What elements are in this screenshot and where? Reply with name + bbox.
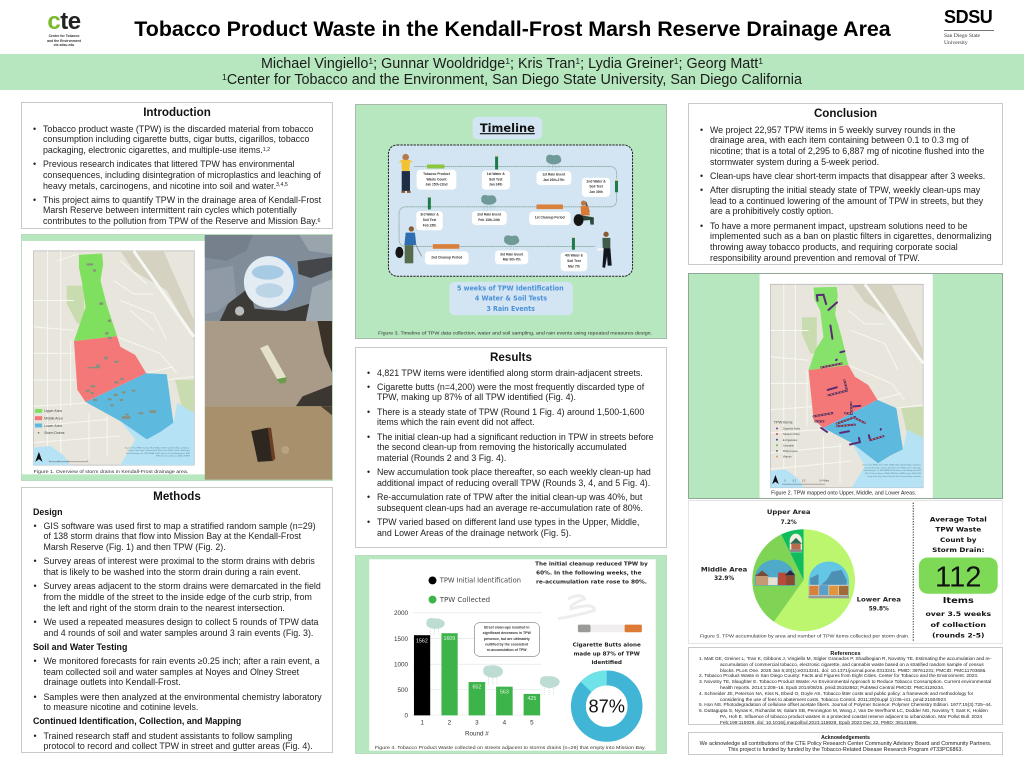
timeline labels: 3rd Rain Event — [500, 252, 524, 256]
summary: study counts: 5 weeks of TPW Identification — [457, 285, 564, 293]
bar chart: TPW by round: 1000 — [394, 662, 408, 669]
map legend: TPW items: TPW Items — [774, 420, 793, 424]
text: results bullets — [367, 368, 654, 538]
timeline labels: Feb 15th — [423, 223, 436, 227]
text: methods content: We monitored forecasts for rain events ≥0.25 inch; after a rain event, a — [44, 656, 320, 666]
authors band — [0, 54, 1024, 90]
heading: conclusion: Conclusion — [814, 106, 877, 120]
photo: tobacco tin on asphalt — [205, 235, 332, 321]
text: conclusion bullets: Clean-ups have clear short-term impacts that disappear after 3 weeks. — [710, 171, 985, 181]
map legend — [35, 409, 65, 435]
bar chart: TPW by round: 4 — [503, 719, 507, 726]
heading: methods: Methods — [153, 490, 201, 502]
headline: cleanup reduction — [535, 562, 648, 585]
text: results bullets: TPW, making up 87% of all TPW identified (Fig. 4). — [377, 392, 576, 402]
text: methods content: team collected soil and water samples at Noyes and Olney Street — [44, 667, 299, 677]
callout: average waste count: Count by — [940, 537, 976, 544]
map attribution: Sources: Esri, HERE, Garmin, FAO, NOAA, USGS, OpenStreetMap contributors, — [125, 447, 190, 450]
timeline labels — [416, 170, 610, 271]
map: TPW items by area — [770, 284, 923, 488]
text: acknowledgement: This project is funded by funded by the Tobacco-Related Disease Research Program #T33PC6863. — [728, 747, 963, 753]
text: methods content: the left and right of the storm drain to the nearest intersection. — [44, 603, 285, 613]
text: reference list — [699, 656, 992, 726]
callout: average waste count: over 3.5 weeks — [925, 610, 991, 618]
text: methods content: of 138 storm drains that flow into Mission Bay at the Kendall-Frost — [44, 531, 301, 541]
map legend: TPW items: E-Cigarettes — [783, 438, 798, 442]
map legend: Upper Area — [44, 409, 62, 413]
text: methods content: Samples were then analyzed at the environmental chemistry laboratory — [44, 692, 322, 702]
callout: clean-up effect — [474, 623, 539, 656]
text: conclusion bullets: After disrupting the initial steady state of TPW, weekly clean-ups may — [710, 185, 980, 195]
map legend: Middle Area — [44, 416, 63, 420]
text: reference list: blocks. PLoS One. 2025 Jan 6;20(1):e0313241. doi: 10.1371/journal.pone.0313241. PMID: 39761231; PMCID: PMC11703686. — [720, 669, 987, 674]
timeline labels: Soil Test — [567, 259, 582, 263]
text: conclusion bullets: responsibility around prevention and removal of TPW. — [710, 253, 920, 263]
text: introduction bullets: contributes to the pollution from TPW of the Reserve and Mission Bay.6 — [43, 216, 320, 226]
test tube 2 — [615, 179, 618, 192]
text: reference list: 1. Matt GE, Greiner L, Tran K, Gibbons J, Vingiello M, Stigler Granados P, Shadbegian R, Novotny TE. Estimating the accumulation and re- — [699, 657, 991, 662]
callout: average waste count: 112 — [935, 562, 982, 593]
panel: introduction — [21, 102, 333, 229]
text: introduction bullets: Tobacco product waste (TPW) is the discarded material from tobacco — [43, 124, 313, 134]
text: methods content: GIS software was used first to map a stratified random sample (n=29) — [44, 521, 316, 531]
test tube 4 — [572, 236, 575, 250]
map attribution — [862, 463, 922, 478]
text: results bullets: New accumulation took place thereafter, so each weekly clean-up had — [377, 467, 651, 477]
timeline labels: Feb 13th-14th — [478, 218, 500, 222]
panel: conclusion — [688, 103, 1003, 265]
map attribution: NPS, US Census Bureau, USDA, USFWS — [156, 455, 191, 458]
text: methods content: Continued Identification, Collection, and Mapping — [33, 716, 241, 726]
bar chart: TPW by round: Round # — [465, 731, 489, 738]
bar chart: TPW by round: 1562 — [416, 638, 428, 644]
text: introduction bullets: Marsh Reserve between intermittent rain cycles which potentially — [43, 205, 297, 215]
panel: figure 4 chart — [355, 555, 667, 754]
text: reference list: 4. Schneider JE, Peterson NA, Kiss N, Ebeid O, Doyle AS. Tobacco litter costs and public policy: a framework and methodology for — [699, 692, 973, 697]
bar chart: TPW by round: 652 — [472, 685, 481, 691]
map legend: TPW items: Multipurpose — [783, 449, 798, 453]
logo: cte: cte.sdsu.edu — [54, 43, 74, 47]
bar chart: TPW by round: 1 — [420, 719, 424, 726]
timeline labels: 2nd Water & — [587, 179, 606, 183]
text: results bullets: The initial clean-up had a significant reduction in TPW in streets before — [377, 432, 654, 442]
heading: results: Results — [490, 350, 532, 364]
photo: buried butt in sand — [205, 406, 332, 480]
pie labels — [701, 510, 901, 612]
map attribution: County of San Diego, California State Parks, Esri, HERE, Garmin, SafeGraph, — [864, 466, 922, 469]
text: conclusion bullets: To have a more permanent impact, upstream solutions need to be — [710, 221, 968, 231]
north arrow and scale — [35, 452, 87, 462]
timeline labels: 2nd Rain Event — [477, 213, 502, 217]
heading: acknowledgements: Acknowledgements — [821, 734, 870, 740]
logo: cte: and the Environment — [47, 39, 81, 43]
text: conclusion bullets: nicotine; that is a total of 2,295 to 6,887 mg of nicotine flushed into the — [710, 146, 984, 156]
map: storm drains overview — [34, 251, 194, 465]
text: results bullets: subsequent clean-ups had an average re-accumulation rate of 80%. — [377, 503, 643, 513]
donut chart: 87 percent — [578, 671, 635, 734]
timeline labels: Soil Test — [423, 218, 437, 222]
text: conclusion bullets: We project 22,957 TPW items in 5 weekly survey rounds in the — [710, 124, 955, 134]
timeline labels: Waste Count — [426, 177, 447, 181]
cloud 3 — [504, 235, 519, 250]
text: reference list: accumulation of commercial tobacco, electronic cigarette, and cannabis waste based on a stratified random sample of census — [720, 663, 984, 668]
text: introduction bullets: This project aims to quantify TPW in the drainage area of Kendall-Frost — [43, 195, 321, 205]
callout: clean-up effect: significant decreases in TPW — [483, 631, 531, 635]
text: conclusion bullets: stormwater system during a 5-week period. — [710, 157, 879, 167]
timeline diagram — [388, 145, 633, 276]
text: methods content — [33, 506, 322, 751]
timeline labels: Jan 26th-27th — [543, 178, 564, 182]
photo: cigarette butt on concrete — [205, 321, 332, 406]
text: methods content: Survey areas of interest were proximal to the storm drains with debris — [44, 556, 315, 566]
panel: figure 2 map — [688, 273, 1003, 499]
map legend: TPW items — [774, 420, 801, 459]
text: results bullets: the second clean-up from removing the historically accumulated — [377, 442, 627, 452]
person: walking collector — [597, 232, 612, 268]
icon: lower area storefronts — [809, 561, 849, 598]
text: cigarette butt share — [573, 643, 641, 666]
cloud 2 — [481, 195, 496, 210]
callout: average waste count: Storm Drain: — [932, 547, 984, 554]
map legend: Lower Area — [44, 424, 62, 428]
bar chart: TPW by round: 5 — [530, 719, 534, 726]
timeline labels: Mar 7th — [568, 264, 580, 268]
text: results bullets: items which the rain event did not affect. — [377, 417, 535, 427]
text: results bullets: TPW varied based on different land use types in the Upper, Middle, — [377, 517, 639, 527]
logo: SDSU: SDSU — [944, 7, 992, 27]
area: lower — [86, 373, 173, 439]
text: conclusion bullets: are a prohibitively costly option. — [710, 206, 833, 216]
text: methods content: and 4 rounds of soil and water samples around 3 rain events (Fig. 3). — [44, 628, 313, 638]
map attribution — [125, 447, 191, 458]
bar chart: TPW by round: 500 — [398, 687, 408, 694]
bar: waste count — [427, 164, 444, 168]
text: reference list: 3. Novotny TE, Slaughter E. Tobacco Product Waste: An Environmental Approach to Reduce Tobacco Consumption. Current environmental — [699, 680, 991, 685]
heading: timeline — [473, 117, 542, 139]
timeline labels: Jan 30th — [589, 190, 603, 194]
logo: cte: cte — [47, 8, 81, 35]
pie labels: 32.9% — [714, 576, 734, 582]
text: reference list: 5. Hon NS. Photodegradation of cellulose offset acetate fibers. Journal of Polymer Science: Polymer Chemistry Edition. 1977;15(3):725–44. — [699, 703, 992, 708]
heading: references: References — [830, 650, 861, 656]
pie labels: 7.2% — [781, 520, 797, 526]
text: results bullets: additional impact of reducing overall TPW (Rounds 3, 4, and 5 Fig. 4). — [377, 478, 650, 488]
text: reference list: health reports. 2014;1:208–16. Epub 2014/08/26. pmid:25152862; PubMed Central PMCID: PMC4129234. — [720, 686, 944, 691]
person: observer — [398, 154, 413, 193]
chart legend: TPW Initial Identification — [439, 577, 521, 585]
icon: middle area houses — [755, 560, 795, 586]
caption: figure 1: Figure 1. Overview of storm drains in Kendall-Frost drainage area. — [34, 469, 188, 475]
callout: average waste count — [919, 516, 998, 640]
timeline labels: 1st Cleanup Period — [535, 215, 565, 219]
text: introduction bullets: consumption including cigarette butts, cigar butts, cigarillos, tobacco — [43, 134, 309, 144]
timeline labels: Soil Test — [589, 185, 604, 189]
logo: SDSU — [944, 7, 994, 46]
chart legend — [429, 576, 521, 604]
text: results bullets: Re-accumulation rate of TPW after the initial clean-up was 40%, but — [377, 492, 642, 502]
bar chart: TPW by round: 1609 — [444, 636, 455, 642]
text: methods content: Survey areas adjacent to the storm drains were demarcated in the field — [44, 581, 321, 591]
test tube 3 — [428, 196, 431, 209]
callout: average waste count: Items — [943, 596, 974, 605]
text: cigarette butt share: identified — [591, 660, 622, 666]
callout: clean-up effect: Street clean-ups resulted in — [484, 626, 529, 630]
logo: SDSU: University — [944, 40, 968, 46]
text: reference list: 2. Tobacco Product Waste in San Diego County: Facts and Figures from Eight Cities. Center for Tobacco and the Environment. 2023. — [699, 674, 978, 679]
summary: study counts — [449, 282, 573, 315]
affiliation: 1Center for Tobacco and the Environment, San Diego State University, San Diego California — [222, 72, 802, 88]
timeline labels: 4th Water & — [565, 254, 584, 258]
caption: figure 5: Figure 5. TPW accumulation by area and number of TPW items collected per storm drain. — [700, 633, 910, 639]
text: cigarette butt share: made up 87% of TPW — [574, 651, 641, 657]
text: reference list: 6. Duttagupta S, Nynas K, Richardot W, Salam SB, Pennington M, Wong J, Van De Werfhorst LC, Dodder NG, Novotny T, Sant K, Holden — [699, 709, 988, 714]
timeline labels: Jan 15th-22nd — [425, 183, 448, 187]
pie labels: Upper Area — [767, 510, 811, 516]
caption: figure 2: Figure 2. TPW mapped onto Upper, Middle, and Lower Areas. — [771, 491, 916, 497]
pie chart: TPW by area — [752, 529, 855, 631]
headline: cleanup reduction: The initial cleanup reduced TPW by — [535, 562, 648, 568]
text: cigarette butt share: Cigarette Butts alone — [573, 643, 641, 649]
headline: cleanup reduction: 60%. In the following weeks, the — [536, 570, 642, 576]
pie labels: 59.8% — [869, 606, 889, 612]
map attribution: Sources: Esri, HERE, Garmin, FAO, NOAA, USGS, OpenStreetMap contributors, — [862, 463, 922, 466]
map legend: TPW items: Vitamin — [783, 455, 792, 459]
text: conclusion bullets — [700, 124, 992, 263]
area: middle — [74, 336, 146, 402]
text: conclusion bullets: throwing away tobacco products, and requiring corporate social — [710, 242, 958, 252]
timeline labels: Tobacco Product — [423, 172, 451, 176]
panel: methods — [21, 487, 333, 753]
timeline labels: 2nd Cleanup Period — [431, 255, 462, 259]
pie labels: Lower Area — [857, 598, 901, 604]
logo: SDSU: San Diego State — [944, 33, 980, 39]
text: acknowledgement — [700, 741, 991, 753]
text: results bullets: Cigarette butts (n=4,200) were the most frequently discarded type of — [377, 382, 644, 392]
test tube 1 — [495, 155, 498, 169]
map attribution: GeoTechnologies, Inc, METI/NASA, USGS, Bureau of Land Management, EPA, — [863, 469, 922, 472]
person: crouching cleaner — [574, 201, 594, 226]
text: acknowledgement: We acknowledge all contributions of the CTE Policy Research Center Community Advisory Board and Community Partners. — [700, 741, 991, 747]
logo: cte: Center for Tobacco — [49, 34, 79, 38]
callout: average waste count: TPW Waste — [935, 527, 981, 534]
north arrow and scale: 0.2 — [802, 479, 806, 482]
text: introduction bullets: packaging, electronic cigarettes, and multiple-use items.1,2 — [43, 145, 270, 155]
map attribution: County of San Diego, California State Parks, Esri, HERE, Garmin, SafeGraph, — [127, 449, 190, 452]
panel: figure 1 map and photos — [21, 234, 333, 481]
cloud 1 — [546, 155, 561, 170]
TPW item points — [814, 295, 883, 444]
donut chart: 87 percent: 87% — [588, 697, 625, 717]
bar chart: TPW by round — [394, 610, 541, 738]
text: methods content: Trained research staff and student assistants to follow sampling — [44, 731, 292, 741]
summary: study counts: 3 Rain Events — [486, 305, 535, 313]
map attribution: NPS, US Census Bureau, USDA, USFWS, Esri, HERE, Garmin, NGA, USGS — [865, 472, 922, 475]
heading: introduction: Introduction — [143, 106, 211, 119]
north arrow and scale — [772, 475, 830, 484]
text: conclusion bullets: implemented such as a ban on plastic filters in cigarettes, denormalizing — [710, 231, 992, 241]
text: reference list: Feb;199:115929. doi: 10.1016/j.marpolbul.2023.115929. Epub 2023 Dec 22. PMID: 38141586. — [720, 721, 918, 726]
text: introduction bullets — [33, 124, 321, 226]
pie labels: Middle Area — [701, 567, 747, 573]
north arrow and scale: 0.4 Miles — [819, 479, 830, 482]
north arrow and scale: 0.1 — [793, 479, 797, 482]
text: results bullets: and Lower Areas of the drainage network (Fig. 5). — [377, 528, 571, 538]
map attribution: GeoTechnologies, Inc, METI/NASA, USGS, Bureau of Land Management, EPA, — [126, 452, 190, 455]
caption: figure 4: Figure 4. Tobacco Product Waste collected on streets adjacent to storms drains (n=29) that empty into Mission Bay. — [375, 745, 646, 751]
text: methods content: We used a repeated measures design to collect 5 rounds of TPW data — [44, 617, 318, 627]
bar chart: TPW by round: 0 — [404, 712, 408, 719]
timeline labels: 3rd Water & — [420, 213, 439, 217]
panel: acknowledgements — [688, 732, 1003, 755]
text: methods content: that is likely to be washed into the storm drain during a rain event. — [44, 567, 301, 577]
text: results bullets: There is a steady state of TPW (Round 1 Fig. 4) around 1,500-1,600 — [377, 407, 644, 417]
timeline labels: Soil Test — [489, 177, 503, 181]
text: methods content: Soil and Water Testing — [33, 642, 127, 652]
text: methods content: protocol to record and collect TPW in street and gutter areas (Fig. 4). — [44, 741, 313, 751]
text: results bullets: material (Rounds 2 and 3 Fig. 4). — [377, 453, 506, 463]
title: Tobacco Product Waste in the Kendall-Frost Marsh Reserve Drainage Area — [134, 17, 891, 41]
area: middle — [809, 365, 877, 428]
authors: Michael Vingiello1; Gunnar Wooldridge1; Kris Tran1; Lydia Greiner1; Georg Matt1 — [261, 56, 763, 72]
bar chart: TPW by round: 563 — [500, 689, 509, 695]
caption: figure 3: Figure 3. Timeline of TPW data collection, water and soil sampling, and rain events using repeated measures design. — [378, 331, 652, 337]
bar: second cleanup — [433, 244, 459, 249]
map legend: Storm Drains — [44, 431, 65, 435]
bar chart: TPW by round: 2 — [448, 719, 452, 726]
map attribution: County of San Diego, Maxar, Microsoft, Esri Community Maps contributors — [867, 475, 921, 478]
person: collector with bag — [395, 226, 422, 263]
bar chart: TPW by round: 425 — [527, 696, 536, 702]
north arrow and scale: 0 — [784, 479, 786, 482]
text: results bullets: 4,821 TPW items were identified along storm drain-adjacent streets. — [377, 368, 643, 378]
callout: clean-up effect: presence, but are ultimately — [484, 637, 530, 641]
text: methods content: Marsh Reserve (Fig. 1) and then TPW (Fig. 2). — [44, 542, 226, 552]
panel: figure 5 pie and counts — [688, 500, 1003, 644]
map legend: TPW items: Tobacco Other — [783, 432, 800, 436]
bar: first cleanup — [537, 204, 563, 209]
map legend: TPW items: Cigarette Butts — [783, 427, 801, 431]
text: methods content: drainage outlets into Kendall-Frost. — [44, 677, 181, 687]
text: conclusion bullets: drainage area, with each item containing between 0.1 to 0.3 mg of — [710, 135, 969, 145]
timeline path — [399, 166, 617, 246]
text: reference list: PA, Hoh E. Influence of tobacco product wastes in a protected coastal reserve adjacent to urbanization. Mar Pollut Bull. 2024 — [720, 715, 982, 720]
icon: cigarette — [558, 596, 642, 632]
timeline labels: 1st Rain Event — [542, 173, 566, 177]
icon: upper area house — [790, 534, 802, 552]
area: upper — [74, 254, 117, 341]
callout: average waste count: (rounds 2-5) — [932, 632, 984, 640]
text: introduction bullets: consequences, including disintegration of microplastics and leaching of — [43, 170, 321, 180]
timeline labels: 1st Water & — [487, 172, 505, 176]
headline: cleanup reduction: re-accumulation rate rose to 80%. — [536, 579, 647, 585]
timeline labels: Jan 24th — [489, 183, 502, 187]
timeline labels: Mar 6th-7th — [503, 258, 521, 262]
summary: study counts: 4 Water & Soil Tests — [475, 295, 547, 303]
panel: references — [688, 647, 1003, 725]
panel: timeline figure 3 — [355, 104, 667, 339]
map legend: TPW items: Cannabis — [783, 443, 795, 447]
text: introduction bullets: heavy metals, carcinogens, and nicotine into soil and water.3,4,5 — [43, 181, 288, 191]
callout: clean-up effect: nullified by the consistent — [485, 642, 529, 646]
chart legend: TPW Collected — [439, 596, 490, 604]
logo: cte — [47, 8, 81, 47]
text: conclusion bullets: lead to a continued lowering of the amount of TPW in streets, but they — [710, 196, 983, 206]
heading: timeline: Timeline — [480, 121, 535, 135]
rain clouds on chart — [426, 618, 560, 695]
callout: average waste count: of collection — [930, 621, 986, 629]
area: lower — [823, 400, 903, 463]
text: methods content: to measure nicotine and cotinine levels. — [44, 702, 198, 712]
text: methods content: from the middle of the street to the inside edge of the curb strip, from — [44, 592, 312, 602]
text: methods content: Design — [33, 506, 62, 516]
panel: results — [355, 347, 667, 548]
bar chart: TPW by round: 1500 — [394, 636, 408, 643]
callout: average waste count: Average Total — [930, 516, 987, 523]
bar chart: TPW by round: 2000 — [394, 610, 408, 617]
text: introduction bullets: Previous research indicates that littered TPW has environmental — [43, 159, 295, 169]
callout: clean-up effect: re-accumulation of TPW — [487, 648, 527, 652]
bar chart: TPW by round: 3 — [475, 719, 479, 726]
area: upper — [809, 287, 848, 370]
text: reference list: considering the use of fees to abatement costs. Tobacco Control. 2011;20(Suppl 1):i36–i41. pmid:21504923 — [720, 698, 946, 703]
